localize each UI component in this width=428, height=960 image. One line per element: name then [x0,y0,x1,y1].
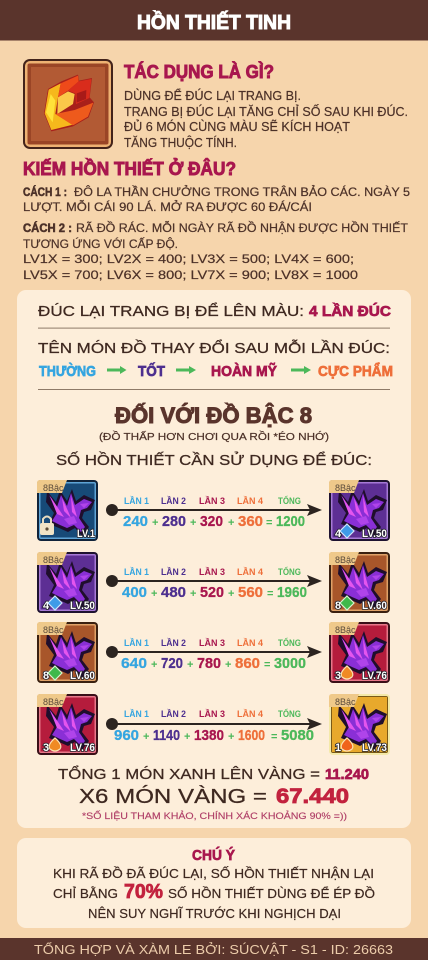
text: method 1: LƯỢT. MỖI CÁI 90 LÁ. MỞ RA ĐƯỢC 60 ĐÁ/CÁI [23,201,312,214]
arrow [106,575,322,587]
item icon: purple LV.50: LV.50 [70,600,95,612]
text: what it does [124,88,408,150]
item icon: orange LV.60: 8Bậc [43,625,64,635]
attempt labels: TỔNG [278,637,301,649]
costs: 1380 [194,727,224,744]
attempt labels: LẦN 3 [199,638,225,649]
item icon: red LV.76: 8Bậc [335,625,356,635]
item icon: gold LV.73: 8Bậc [335,697,356,707]
text: method 2: LV5X = 700; LV6X = 800; LV7X = 900; LV8X = 1000 [23,270,358,282]
costs: 280 [162,513,186,530]
item icon: gold LV.73: 1 [335,742,341,754]
costs: 780 [197,655,221,672]
header band [0,0,428,40]
text: method 2: RÃ ĐỒ RÁC. MỖI NGÀY RÃ ĐỒ NHẬN ĐƯỢC HỒN THIẾT [76,222,408,235]
attempt labels: LẦN 2 [161,709,186,720]
attempt labels: LẦN 3 [199,709,225,720]
costs: 3000 [274,655,306,672]
attempt labels: LẦN 1 [124,567,150,578]
costs: 1140 [153,727,180,744]
warning text: CHỈ BẰNG [53,886,118,901]
costs: 1600 [238,727,265,744]
costs: = [267,588,273,600]
attempt labels [124,708,301,720]
costs: + [228,731,234,743]
totals: *SỐ LIỆU THAM KHẢO, CHÍNH XÁC KHOẢNG 90% =)) [82,810,347,822]
costs: + [151,588,157,600]
warning text: NÊN SUY NGHĨ TRƯỚC KHI NGHỊCH DẠI [88,906,341,921]
heading: note: CHÚ Ý [192,846,235,864]
attempt labels [124,637,301,649]
row 1: common to good [37,480,390,541]
text: what it does: TRANG BỊ ĐÚC LẠI TĂNG CHỈ SỐ SAU KHI ĐÚC. [124,104,408,119]
costs: 480 [161,584,186,601]
arrow [106,646,322,658]
costs: 1200 [276,513,305,530]
costs: 5080 [281,727,314,744]
costs [123,513,305,530]
item icon: purple LV.50: 8Bậc [43,555,64,565]
arrow [106,504,322,516]
costs: 240 [123,513,148,530]
costs: 400 [122,584,147,601]
costs: = [264,659,270,671]
text: method 2 [23,222,408,282]
attempt labels: TỔNG [278,708,301,720]
item icon: purple LV.50 [329,480,390,541]
attempt labels: LẦN 1 [124,496,150,507]
costs: + [225,659,231,671]
attempt labels: LẦN 1 [124,638,150,649]
item icon: orange LV.60 [329,552,390,613]
costs: + [187,659,193,671]
costs: 860 [235,655,260,672]
attempt labels [124,495,301,507]
warning text: SỐ HỒN THIẾT DÙNG ĐỂ ÉP ĐỒ [168,886,375,901]
warning text: 70% [124,881,163,903]
quality progression [39,362,393,380]
text: method 2: CÁCH 2 : [23,222,72,235]
arrow [106,718,322,730]
text: method 1: CÁCH 1 : [23,186,67,199]
subheading: soul needed: SỐ HỒN THIẾT CẦN SỬ DỤNG ĐỂ ĐÚC: [56,451,372,469]
totals: 11.240 [325,766,369,783]
totals [58,765,369,822]
attempt labels: LẦN 3 [199,496,225,507]
attempt labels: TỔNG [278,495,301,507]
costs: + [228,517,234,529]
item icon: red LV.76 [37,694,98,755]
panel: reforging [17,290,411,828]
text: reforge count: ĐÚC LẠI TRANG BỊ ĐỂ LÊN MÀU: [38,302,304,320]
costs: 520 [200,584,224,601]
costs: = [266,517,272,529]
item icon: purple LV.50: 8Bậc [335,483,356,493]
costs: + [143,731,149,743]
heading: where to earn: KIẾM HỒN THIẾT Ở ĐÂU? [23,158,236,179]
attempt labels: TỔNG [278,566,301,578]
attempt labels: LẦN 2 [161,567,186,578]
attempt labels: LẦN 4 [237,567,264,578]
item icon: purple LV.50: 4 [335,528,342,540]
warning text: KHI RÃ ĐỒ ĐÃ ĐÚC LẠI, SỐ HỒN THIẾT NHẬN LẠI [53,866,374,881]
item icon: red LV.76: LV.76 [362,670,387,682]
warning text [53,866,375,921]
attempt labels: LẦN 2 [161,496,186,507]
item icon: red LV.76: LV.76 [70,742,95,754]
costs: 720 [161,655,183,672]
heading: tier 8: ĐỐI VỚI ĐỒ BẬC 8 [115,402,312,428]
row 3: perfect to supreme [37,622,390,683]
text: method 2: TƯƠNG ỨNG VỚI CẤP ĐỘ. [23,238,178,251]
costs: + [152,517,158,529]
text: what it does: ĐỦ 6 MÓN CÙNG MÀU SẼ KÍCH HOẠT [124,119,350,134]
text: name change: TÊN MÓN ĐỒ THAY ĐỔI SAU MỖI LẦN ĐÚC: [38,339,390,357]
title: HỒN THIẾT TINH [137,10,291,34]
item icon: gold LV.73: LV.73 [362,742,387,754]
footer credit: TỔNG HỢP VÀ XÀM LE BỞI: SÚCVẬT - S1 - ID: 26663 [34,942,393,957]
item icon: purple LV.50 [37,552,98,613]
attempt labels: LẦN 1 [124,709,150,720]
costs: + [190,517,196,529]
costs: + [190,588,196,600]
attempt labels: LẦN 4 [237,496,264,507]
attempt labels [124,566,301,578]
costs [114,727,314,744]
item icon: orange LV.60: 8 [335,600,341,612]
item icon: red LV.76: 3 [43,742,49,754]
row 4: supreme to gold [37,694,390,755]
item icon: blue LV.1: 8Bậc [43,483,64,493]
item icon: orange LV.60: LV.60 [362,600,387,612]
totals: 67.440 [276,785,349,808]
totals: X6 MÓN VÀNG = [79,785,267,808]
icon: soul crystal [23,59,113,149]
costs: + [228,588,234,600]
item icon: orange LV.60: 8Bậc [335,555,356,565]
costs [121,655,306,672]
costs: 560 [238,584,263,601]
text: method 2: LV1X = 300; LV2X = 400; LV3X = 500; LV4X = 600; [23,254,354,266]
costs: = [271,731,277,743]
costs [122,584,307,601]
item icon: blue LV.1 [37,480,98,541]
quality progression: HOÀN MỸ [211,362,277,380]
item icon: red LV.76 [329,622,390,683]
item icon: red LV.76: 3 [335,670,341,682]
costs: 1960 [277,584,307,601]
subheading note: (ĐỒ THẤP HƠN CHƠI QUA RỒI *ÉO NHỚ) [99,430,329,443]
heading: what it does: TÁC DỤNG LÀ GÌ? [124,61,274,82]
costs: 960 [114,727,139,744]
attempt labels: LẦN 2 [161,638,186,649]
costs: + [184,731,190,743]
costs: 360 [238,513,263,530]
text: method 1: ĐÔ LA THẦN CHƯỞNG TRONG TRÂN BẢO CÁC. NGÀY 5 [74,186,410,199]
text: method 1 [23,186,410,214]
costs: 320 [200,513,223,530]
quality progression: CỰC PHẨM [318,362,393,380]
attempt labels: LẦN 4 [237,638,264,649]
item icon: gold LV.73 [329,694,390,755]
costs: + [151,659,157,671]
row 2: good to perfect [37,552,390,613]
item icon: orange LV.60: 8 [43,670,49,682]
quality progression: THƯỜNG [39,362,96,380]
item icon: purple LV.50: 4 [43,600,50,612]
item icon: orange LV.60: LV.60 [70,670,95,682]
text: what it does: DÙNG ĐỂ ĐÚC LẠI TRANG BỊ. [124,88,301,103]
attempt labels: LẦN 4 [237,709,264,720]
quality progression: TỐT [138,362,165,380]
item icon: orange LV.60 [37,622,98,683]
footer band [0,938,428,960]
item icon: red LV.76: 8Bậc [43,697,64,707]
item icon: blue LV.1: LV.1 [77,528,95,540]
costs: 640 [121,655,147,672]
text: reforge count [38,302,391,320]
panel: warning [17,838,411,928]
text: what it does: TĂNG THUỘC TÍNH. [124,135,237,150]
totals: TỔNG 1 MÓN XANH LÊN VÀNG = [58,765,320,783]
text: reforge count: 4 LẦN ĐÚC [309,302,391,320]
item icon: purple LV.50: LV.50 [362,528,387,540]
attempt labels: LẦN 3 [199,567,225,578]
